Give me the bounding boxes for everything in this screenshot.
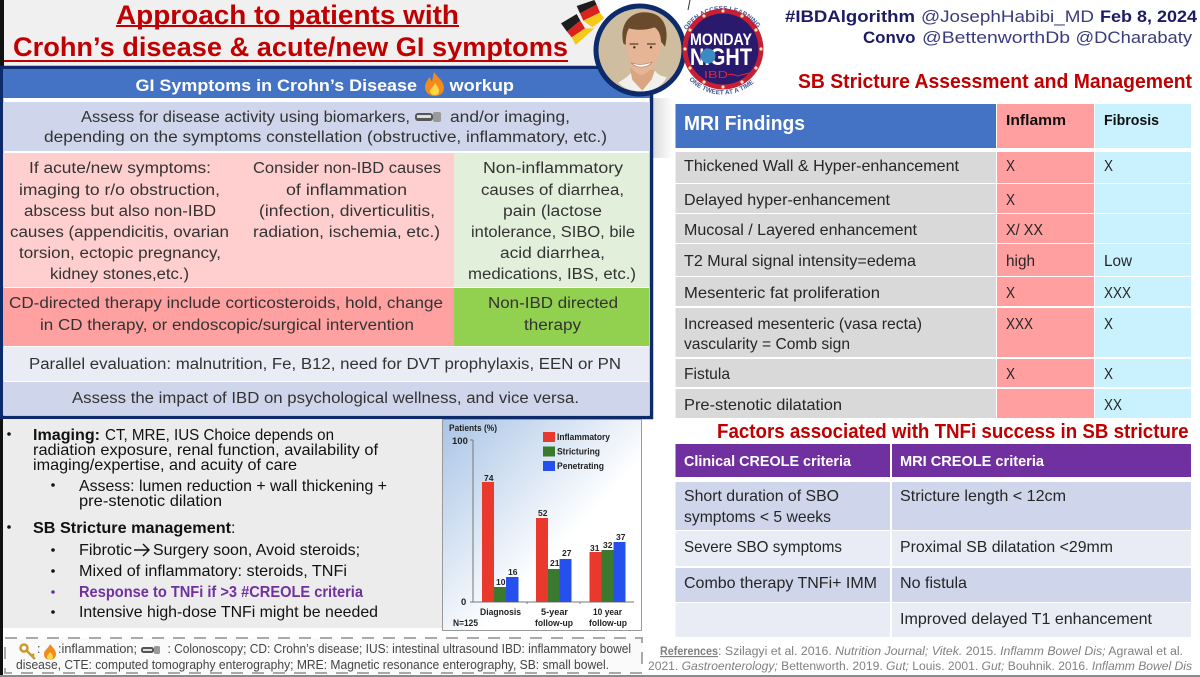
row: short duration: Stricture length < 12cm <box>900 488 1066 505</box>
cell: non-inflammatory causes: causes of diarrhea, <box>481 182 624 199</box>
bullet: SB stricture management: Mixed of inflammatory: steroids, TNFi <box>79 563 347 580</box>
bullet: SB stricture management: Response to TNFi if >3 #CREOLE criteria <box>79 584 363 601</box>
logo: Monday Night IBD: MONDAY <box>690 30 753 49</box>
legend: Penetrating <box>557 461 604 472</box>
cell: non-inflammatory causes: Non-inflammatory <box>483 160 623 177</box>
header: hashtag and handles: #IBDAlgorithm <box>785 7 915 26</box>
fibrosis column values <box>1104 158 1132 414</box>
bars: diagnosis: 16 <box>508 567 518 577</box>
inflammation column values: X <box>1006 158 1015 175</box>
row: combo therapy <box>676 568 1191 602</box>
legend: abbreviations: :inflammation; <box>58 642 137 656</box>
bullet: SB stricture management: Fibrotic <box>79 542 132 559</box>
fibrosis column values: Low <box>1104 253 1132 270</box>
axis labels <box>453 607 627 629</box>
bullet: imaging <box>7 427 387 510</box>
row: short duration: Short duration of SBO <box>684 488 839 505</box>
bullet: imaging: CT, MRE, IUS Choice depends on <box>105 427 334 444</box>
photo: speaker portrait <box>596 6 684 94</box>
bars: diagnosis: 74 <box>484 473 494 483</box>
header: hashtag and handles: Feb 8, 2024 <box>1100 7 1198 26</box>
inflammation column values: X <box>1006 366 1015 383</box>
row: combo therapy: No fistula <box>900 575 967 592</box>
row: severe symptoms: Severe SBO symptoms <box>684 539 842 556</box>
axis labels: 5-year <box>541 607 568 618</box>
row: T1 enhancement <box>676 603 1191 637</box>
panel: imaging and stricture management notes <box>0 419 442 677</box>
table header: Inflamm <box>1006 112 1066 129</box>
icon: German flag <box>561 0 604 45</box>
references <box>648 646 1192 673</box>
cell: non-inflammatory causes <box>454 153 649 287</box>
row labels: Thickened Wall & Hyper-enhancement <box>684 158 960 175</box>
row labels: vascularity = Comb sign <box>684 336 850 353</box>
icon: flame <box>44 644 56 660</box>
axis labels: 10 year <box>593 607 622 618</box>
legend: abbreviations <box>5 638 642 673</box>
table: CREOLE criteria <box>676 444 1191 637</box>
inflammation column values: X <box>1006 285 1015 302</box>
cell: non-IBD directed therapy: Non-IBD directed <box>488 295 618 312</box>
fibrosis column values: X <box>1104 316 1113 333</box>
row: psychological wellness: Assess the impact of IBD on psychological wellness, and vice versa. <box>72 390 579 407</box>
cell: non-inflammatory causes: acid diarrhea, <box>500 245 605 262</box>
legend <box>543 432 611 472</box>
legend: abbreviations: : Colonoscopy; CD: Crohn’s disease; IUS: intestinal ultrasound IBD: inflammatory bowel <box>168 642 631 656</box>
row: combo therapy: Combo therapy TNFi+ IMM <box>684 575 877 592</box>
table header: Clinical CREOLE criteria <box>684 453 852 470</box>
bullet: imaging: radiation exposure, renal function, availability of <box>33 442 379 459</box>
cell: CD-directed therapy: in CD therapy, or endoscopic/surgical intervention <box>40 317 414 334</box>
table header: Fibrosis <box>1104 112 1159 129</box>
bullet: SB stricture management <box>7 520 378 621</box>
cell: non-IBD causes of inflammation: Consider non-IBD causes <box>253 160 441 177</box>
header: hashtag and handles: @DCharabaty <box>1076 28 1193 47</box>
title: Crohn’s disease & acute/new GI symptoms <box>13 32 568 62</box>
row: severe symptoms <box>676 531 1191 566</box>
cell: non-IBD causes of inflammation: radiation, ischemia, etc.) <box>253 224 440 241</box>
axis labels: follow-up <box>589 618 627 629</box>
inflammation column values: X <box>1006 192 1015 209</box>
row labels: Fistula <box>684 366 730 383</box>
bullet: SB stricture management: Intensive high-dose TNFi might be needed <box>79 604 378 621</box>
bars: diagnosis: 10 <box>496 577 506 587</box>
header: hashtag and handles: Convo <box>863 28 916 47</box>
icon: key <box>20 644 35 659</box>
references: References <box>660 646 718 658</box>
legend: abbreviations: : <box>37 642 40 656</box>
cell: non-IBD directed therapy: therapy <box>524 317 581 334</box>
inflammation column values <box>1006 158 1043 383</box>
row labels: Mesenteric fat proliferation <box>684 285 880 302</box>
bullet: imaging: imaging/expertise, and acuity of care <box>33 457 297 474</box>
row: assess disease activity: Assess for disease activity using biomarkers, <box>81 109 410 126</box>
table: MRI findings <box>676 104 1191 418</box>
row: parallel evaluation: Parallel evaluation: malnutrition, Fe, B12, need for DVT prophylaxis, EEN or PN <box>29 356 621 373</box>
header: hashtag and handles <box>785 7 1198 47</box>
row: short duration <box>676 482 1191 530</box>
row: psychological wellness <box>3 382 649 415</box>
table header: MRI Findings <box>684 113 805 135</box>
bars: 5-year follow-up: 27 <box>562 548 572 558</box>
legend: abbreviations: disease, CTE: computed tomography enterography; MRE: Magnetic resonance enterography, SB: small bowel. <box>16 658 609 672</box>
bullet: imaging: Imaging: <box>33 427 100 444</box>
bars: 5-year follow-up <box>536 508 572 602</box>
cell: non-IBD directed therapy <box>454 288 649 346</box>
row: assess disease activity <box>3 102 650 151</box>
row: severe symptoms: Proximal SB dilatation <29mm <box>900 539 1113 556</box>
logo: Monday Night IBD: ONE TWEET AT A TIME <box>690 78 754 95</box>
cell: acute/new symptoms <box>3 153 250 287</box>
row labels: T2 Mural signal intensity=edema <box>684 253 916 270</box>
axis labels: Diagnosis <box>480 607 521 618</box>
inflammation column values: XXX <box>1006 316 1033 333</box>
cell: acute/new symptoms: imaging to r/o obstruction, <box>19 182 220 199</box>
table header <box>676 104 1159 148</box>
row: assess disease activity: depending on the symptoms constellation (obstructive, inflammatory, etc.) <box>44 129 607 146</box>
cell: CD-directed therapy: CD-directed therapy include corticosteroids, hold, change <box>9 295 443 312</box>
bars: 10-year follow-up <box>590 532 626 602</box>
row labels: Delayed hyper-enhancement <box>684 192 891 209</box>
fibrosis column values: XXX <box>1104 285 1131 302</box>
row labels: Increased mesenteric (vasa recta) <box>684 316 922 333</box>
bars: 5-year follow-up: 21 <box>550 558 560 568</box>
panel heading: GI Symptoms in Crohn’s Disease <box>136 76 417 95</box>
inflammation column values: X/ XX <box>1006 222 1043 239</box>
bar chart: Crohn's behaviour over time: 100 <box>452 436 468 447</box>
header: hashtag and handles: @JosephHabibi_MD <box>921 7 1094 26</box>
bars: 5-year follow-up: 52 <box>538 508 548 518</box>
row labels <box>684 158 960 414</box>
row: T1 enhancement: Improved delayed T1 enhancement <box>900 611 1153 628</box>
cell: acute/new symptoms: If acute/new symptoms: <box>29 160 211 177</box>
panel heading <box>3 69 650 98</box>
cell: acute/new symptoms: kidney stones,etc.) <box>50 266 189 283</box>
table header: MRI CREOLE criteria <box>900 453 1045 470</box>
inflammation column values: high <box>1006 253 1035 270</box>
bar chart: Crohn's behaviour over time: 0 <box>461 597 466 608</box>
axis labels: follow-up <box>535 618 573 629</box>
row labels: Pre-stenotic dilatation <box>684 397 842 414</box>
cell: non-IBD causes of inflammation: of inflammation <box>286 182 407 199</box>
cell: non-IBD causes of inflammation <box>250 153 454 287</box>
cell: CD-directed therapy <box>3 288 454 346</box>
cell: acute/new symptoms: abscess but also non-IBD <box>24 203 216 220</box>
bullet: SB stricture management: SB Stricture management <box>33 520 232 537</box>
cell: non-inflammatory causes: medications, IBS, etc.) <box>468 266 636 283</box>
bars: 10-year follow-up: 37 <box>616 532 626 542</box>
bar chart: Crohn's behaviour over time: Patients (%) <box>449 423 497 434</box>
table header <box>676 444 1191 477</box>
fibrosis column values: XX <box>1104 397 1122 414</box>
cell: acute/new symptoms: torsion, ectopic pregnancy, <box>19 245 221 262</box>
references: 2021. Gastroenterology; Bettenworth. 2019. Gut; Louis. 2001. Gut; Bouhnik. 2016. Inflamm Bowel Dis <box>648 661 1192 673</box>
axis labels: N=125 <box>453 618 479 629</box>
header: hashtag and handles: @BettenworthDb <box>922 28 1070 47</box>
legend: Inflammatory <box>557 432 611 443</box>
row: short duration: symptoms < 5 weeks <box>684 509 831 526</box>
logo: Monday Night IBD: NIGHT <box>690 44 752 71</box>
bar chart: Crohn's behaviour over time <box>442 420 642 630</box>
cell: non-inflammatory causes: intolerance, SIBO, bile <box>471 224 635 241</box>
title <box>4 0 568 62</box>
bullet: SB stricture management: : <box>231 520 235 537</box>
bullet: imaging: pre-stenotic dilation <box>79 493 222 510</box>
bars: diagnosis <box>482 473 518 602</box>
cell: non-IBD causes of inflammation: (infection, diverticulitis, <box>259 203 435 220</box>
logo: Monday Night IBD <box>682 0 764 95</box>
fibrosis column values: X <box>1104 366 1113 383</box>
bars: 10-year follow-up: 31 <box>590 543 600 553</box>
legend: Stricturing <box>557 446 600 458</box>
bullet: imaging: Assess: lumen reduction + wall thickening + <box>79 478 387 495</box>
cell: acute/new symptoms: causes (appendicitis, ovarian <box>10 224 229 241</box>
title: Approach to patients with <box>116 0 459 30</box>
fibrosis column values: X <box>1104 158 1113 175</box>
logo: Monday Night IBD: IBD <box>704 70 728 81</box>
references: : Szilagyi et al. 2016. Nutrition Journal; Vitek. 2015. Inflamm Bowel Dis; Agrawal et al. <box>718 646 1183 658</box>
panel heading: workup <box>448 76 514 95</box>
cell: non-inflammatory causes: pain (lactose <box>503 203 602 220</box>
icon: colonoscope <box>141 646 160 654</box>
logo: Monday Night IBD: OPEN ACCESS LEARNING <box>684 6 760 30</box>
row labels: Mucosal / Layered enhancement <box>684 222 918 239</box>
row: assess disease activity: and/or imaging, <box>450 109 570 126</box>
bars: 10-year follow-up: 32 <box>603 540 613 550</box>
bullet: SB stricture management: Surgery soon, Avoid steroids; <box>153 542 360 559</box>
row: parallel evaluation <box>3 347 649 381</box>
panel: GI symptoms workup <box>2 68 652 418</box>
heading: SB stricture assessment: SB Stricture Assessment and Management <box>798 71 1192 93</box>
